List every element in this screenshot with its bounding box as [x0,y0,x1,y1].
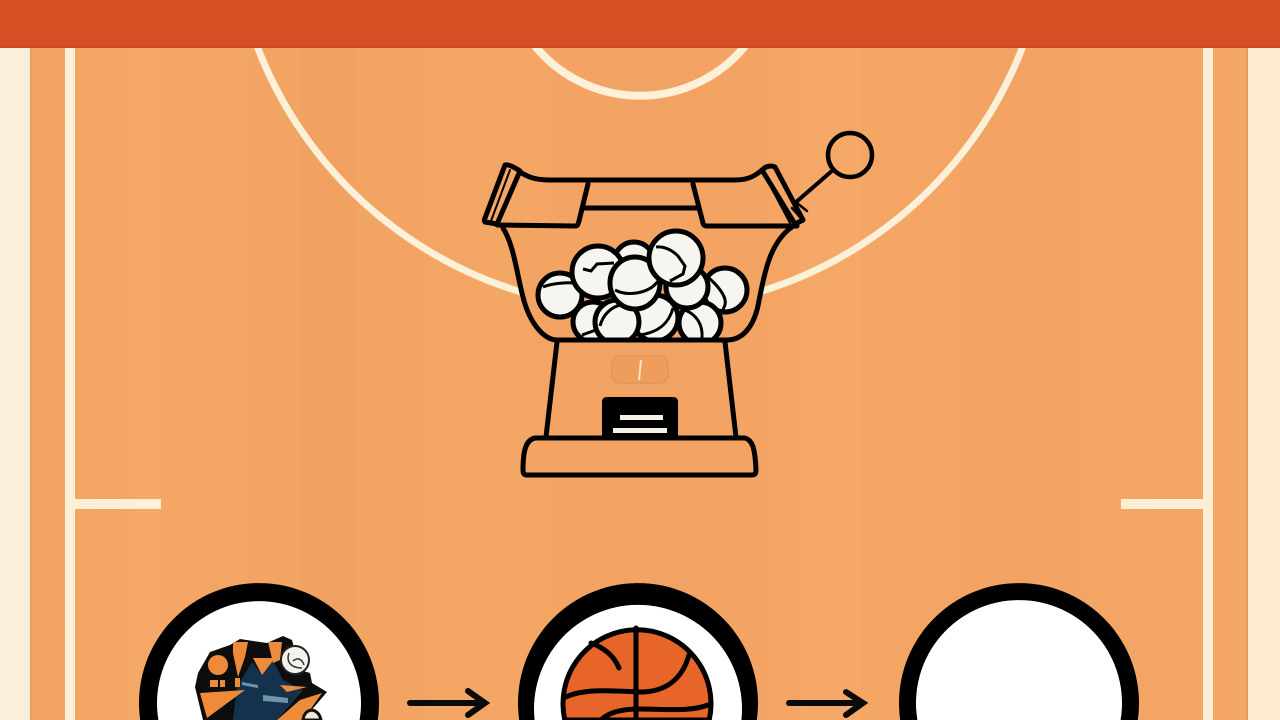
header bar [0,0,1280,48]
arrow: step one to step two [410,691,485,715]
icon: basketball [563,628,711,720]
arrow: step two to step three [789,692,863,715]
machine outline [484,165,803,475]
step circle: empty result [899,583,1139,720]
right margin strip [1246,0,1280,720]
icon: gumball lottery machine [484,133,872,475]
coin slot [612,356,668,383]
crank handle [792,133,872,217]
left margin strip [0,0,32,720]
machine bowl background [503,227,792,340]
step circle: basketball [518,583,758,720]
icon: team mascot logo [195,636,327,720]
step circle: team logo [139,583,379,720]
prize door [602,397,678,437]
lottery balls [538,231,747,344]
